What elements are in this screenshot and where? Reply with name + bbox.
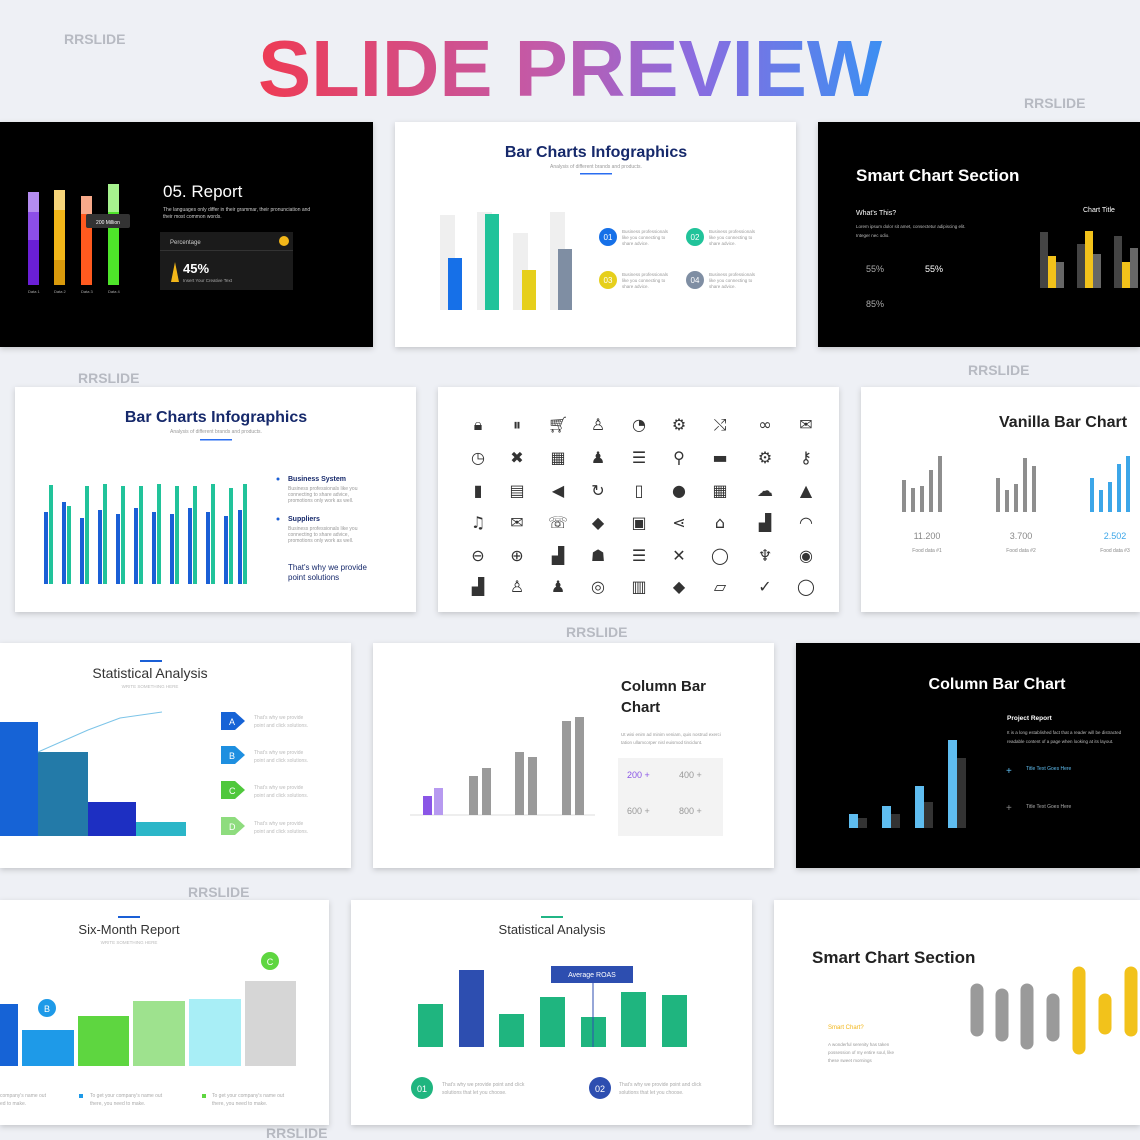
slide: icon grid: ▤ [509, 481, 525, 500]
slide: smart chart section dark: 55% [925, 264, 943, 274]
slide: icon grid: ◯ [711, 546, 729, 565]
slide: icon grid: ▯ [635, 481, 643, 500]
slide: icon grid [438, 387, 839, 612]
slide: column bar chart dark: Column Bar Chart [929, 676, 1066, 693]
slide: bar charts infographics 2: Business professionals like you [288, 526, 358, 532]
slide: icon grid: ☁ [757, 481, 773, 500]
watermarks: RRSLIDE [188, 884, 249, 900]
slide: six-month report: B [44, 1004, 50, 1014]
slide: statistical analysis area: D [229, 822, 236, 832]
slide: statistical analysis area: That's why we provide [254, 785, 304, 791]
slide: six-month report: there, you need to make. [90, 1101, 145, 1107]
slide: statistical analysis bars: solutions that let you choose. [619, 1090, 684, 1096]
slide: 05 report: Insert Your Creative Text [183, 278, 233, 283]
slide: icon grid: ▲ [800, 481, 813, 500]
slide: icon grid: ∞ [758, 415, 772, 434]
slide: icon grid: ♫ [471, 513, 485, 532]
slide: smart chart section dark [818, 122, 1140, 347]
slide: statistical analysis area: point and click solutions. [254, 723, 308, 729]
slide: bar charts infographics 2: point solutions [288, 573, 339, 582]
slide: statistical analysis area: B [229, 751, 235, 761]
slide: smart chart section light: A wonderful serenity has taken [828, 1042, 890, 1047]
slide: statistical analysis bars: solutions that let you choose. [442, 1090, 506, 1096]
slide: bar charts infographics 2: Bar Charts Infographics [125, 409, 307, 426]
slide: icon grid: ▣ [631, 513, 647, 532]
slide: icon grid: ⊖ [471, 546, 485, 565]
slide: bar charts infographics 2: Business System [288, 476, 346, 483]
slide: six-month report: WRITE SOMETHING HERE [101, 940, 157, 945]
slide: bar charts infographics 1: 02 [691, 233, 700, 242]
slide: bar charts infographics 2: That's why we provide [288, 563, 367, 572]
slide: bar charts infographics 1: like you connecting to [622, 278, 666, 283]
slide: six-month report: To get your company's name out [212, 1093, 285, 1099]
slide: bar charts infographics 1: share advice. [709, 284, 736, 289]
slide: column bar chart dark: It is a long established fact that a reader will be distracted [1007, 730, 1122, 735]
slide: icon grid: ◔ [632, 415, 646, 434]
slide: statistical analysis area: WRITE SOMETHING HERE [122, 684, 178, 689]
slide: column bar chart dark: + [1006, 766, 1012, 777]
slide: icon grid: ▮ [474, 481, 482, 500]
slide: vanilla bar chart: Food data #3 [1100, 548, 1130, 554]
slide: icon grid: ◯ [797, 577, 815, 596]
slide: bar charts infographics 1: Bar Charts Infographics [505, 144, 687, 161]
slide: icon grid: ☰ [632, 448, 646, 467]
slide: bar charts infographics 1: 03 [604, 276, 613, 285]
slide: column bar chart dark: Title Text Goes Here [1026, 766, 1072, 772]
slide: 05 report [0, 122, 373, 347]
slide: statistical analysis area: Statistical Analysis [92, 665, 208, 681]
slide: smart chart section dark: What's This? [856, 210, 896, 217]
slide: bar charts infographics 1: like you connecting to [709, 235, 753, 240]
slide: column bar chart dark: + [1006, 803, 1012, 814]
slide: icon grid: ▟ [551, 546, 565, 565]
slide: column bar chart dark: readable content of a page when looking at its layout. [1007, 739, 1113, 744]
slide: column bar chart light: 600 + [627, 806, 650, 816]
slide: statistical analysis area: That's why we provide [254, 715, 304, 721]
slide: statistical analysis area: That's why we provide [254, 821, 304, 827]
slide: vanilla bar chart: Vanilla Bar Chart [999, 414, 1128, 431]
slide: statistical analysis bars: 01 [417, 1084, 427, 1094]
slide: bar charts infographics 1: share advice. [622, 284, 649, 289]
slide: icon grid: ⏸ [513, 415, 521, 434]
slide: bar charts infographics 1: Business professionals [709, 272, 756, 277]
slide: icon grid: ⚲ [673, 448, 685, 467]
slide: icon grid: ◉ [799, 546, 813, 565]
slide: smart chart section dark: 55% [866, 264, 884, 274]
slide: column bar chart dark [796, 643, 1140, 868]
slide: icon grid: ◆ [592, 513, 605, 532]
slide: vanilla bar chart [861, 387, 1140, 612]
slide: bar charts infographics 1: 04 [691, 276, 700, 285]
slide: bar charts infographics 2: promotions only work as well. [288, 498, 353, 504]
slide: icon grid: ☏ [548, 513, 568, 532]
slide: column bar chart light: Ut wisi enim ad minim veniam, quis nostrud exerci [621, 732, 721, 737]
slide: icon grid: ♟ [591, 448, 605, 467]
slide: six-month report: ed to make. [0, 1101, 26, 1107]
slide: smart chart section light [774, 900, 1140, 1125]
slide: statistical analysis bars: Average ROAS [568, 972, 616, 979]
slide: smart chart section light: possession of my entire soul, like [828, 1050, 895, 1055]
slide: bar charts infographics 2: connecting to share advice, [288, 492, 349, 498]
slide: column bar chart dark: Project Report [1007, 715, 1053, 722]
slide: smart chart section dark: Smart Chart Section [856, 166, 1019, 185]
slide: icon grid: ▱ [714, 577, 727, 596]
slide: six-month report: there, you need to make. [212, 1101, 267, 1107]
slide: icon grid: ⋖ [672, 513, 686, 532]
slide: smart chart section dark: Chart Title [1083, 207, 1115, 214]
slide: statistical analysis area: point and click solutions. [254, 793, 308, 799]
slide: 05 report: 05. Report [163, 182, 243, 201]
slide: bar charts infographics 2: Suppliers [288, 516, 320, 523]
slide: 05 report: their most common words. [163, 214, 222, 220]
slide: statistical analysis area: C [229, 786, 236, 796]
slide: icon grid: ◠ [799, 513, 813, 532]
slide: 05 report: Data 2 [54, 289, 67, 294]
slide: icon grid: ◎ [591, 577, 605, 596]
slide: column bar chart light: 200 + [627, 770, 650, 780]
slide: bar charts infographics 1 [395, 122, 796, 347]
slide: icon grid: ✖ [510, 448, 524, 467]
slide: icon grid: ☗ [591, 546, 605, 565]
slide: 05 report: 45% [183, 261, 209, 276]
slide: statistical analysis area: That's why we provide [254, 750, 304, 756]
watermarks: RRSLIDE [78, 370, 139, 386]
slide: six-month report: To get your company's name out [90, 1093, 163, 1099]
slide: statistical analysis bars: That's why we provide point and click [442, 1082, 525, 1088]
slide: icon grid: 🛒︎ [548, 415, 568, 434]
slide: icon grid: ♙ [510, 577, 524, 596]
slide: icon grid: ✉ [799, 415, 813, 434]
slide: vanilla bar chart: Food data #1 [912, 548, 942, 554]
slide: icon grid: ◆ [673, 577, 686, 596]
slide: 05 report: The languages only differ in their grammar, their pronunciation and [163, 207, 310, 213]
title: SLIDE PREVIEW [258, 24, 882, 113]
slide: smart chart section light: Smart Chart? [828, 1025, 864, 1031]
slide: statistical analysis area: point and click solutions. [254, 758, 308, 764]
slide: statistical analysis bars [351, 900, 752, 1125]
slide: bar charts infographics 1: like you connecting to [709, 278, 753, 283]
slide: column bar chart light: 400 + [679, 770, 702, 780]
slide: icon grid: 🔒︎ [474, 415, 482, 434]
slide: statistical analysis area: A [229, 717, 235, 727]
slide: vanilla bar chart: 11.200 [914, 531, 940, 541]
slide: icon grid: ⚙ [758, 448, 772, 467]
slide: six-month report [0, 900, 329, 1125]
slide: icon grid: ↻ [591, 481, 605, 500]
slide: six-month report: C [267, 957, 274, 967]
slide: icon grid: ▥ [631, 577, 647, 596]
slide: 05 report: 200 Million [96, 220, 120, 226]
slide: statistical analysis bars: Statistical Analysis [499, 922, 606, 937]
slide: icon grid: ⤭ [714, 415, 727, 434]
slide: 05 report: Data 1 [28, 289, 41, 294]
slide: icon grid: ▟ [758, 513, 772, 532]
slide: column bar chart light: Column Bar [621, 678, 706, 695]
slide: 05 report: Data 3 [81, 289, 94, 294]
watermarks: RRSLIDE [1024, 95, 1085, 111]
slide: statistical analysis bars: 02 [595, 1084, 605, 1094]
slide: bar charts infographics 1: 01 [604, 233, 613, 242]
slide: bar charts infographics 2: promotions only work as well. [288, 538, 353, 544]
slide: smart chart section dark: 85% [866, 299, 884, 309]
slide: icon grid: ◀ [552, 481, 565, 500]
slide: icon grid: ⊕ [510, 546, 524, 565]
slide: smart chart section light: these sweet mornings [828, 1058, 873, 1063]
slide: icon grid: ♆ [758, 546, 772, 565]
slide: icon grid: ⚙ [672, 415, 686, 434]
slide: icon grid: ▦ [550, 448, 566, 467]
slide: icon grid: ⚷ [800, 448, 812, 467]
slide: icon grid: ◷ [471, 448, 485, 467]
slide: statistical analysis bars: That's why we provide point and click [619, 1082, 702, 1088]
slide: icon grid: ☰ [632, 546, 646, 565]
watermarks: RRSLIDE [968, 362, 1029, 378]
slide: icon grid: ● [672, 481, 686, 500]
slide: bar charts infographics 2: Business professionals like you [288, 486, 358, 492]
slide: smart chart section light: Smart Chart Section [812, 948, 975, 967]
slide: vanilla bar chart: Food data #2 [1006, 548, 1036, 554]
slide: smart chart section dark: Lorem ipsum dolor sit amet, consectetur adipiscing elit. [856, 224, 966, 229]
slide: column bar chart light: Chart [621, 699, 660, 716]
slide: bar charts infographics 1: share advice. [622, 241, 649, 246]
slide: column bar chart light [373, 643, 774, 868]
slide: column bar chart light: 800 + [679, 806, 702, 816]
slide: 05 report: Data 4 [108, 289, 121, 294]
slide: icon grid: ♟ [551, 577, 565, 596]
slide: icon grid: ♙ [591, 415, 605, 434]
slide: column bar chart dark: Title Text Goes Here [1026, 804, 1072, 810]
slide: bar charts infographics 1: share advice. [709, 241, 736, 246]
slide: column bar chart light: tation ullamcorper nisl euismod tincidunt. [621, 740, 702, 745]
slide: bar charts infographics 2: connecting to share advice, [288, 532, 349, 538]
slide: statistical analysis area [0, 643, 351, 868]
slide: icon grid: ▦ [712, 481, 728, 500]
slide: vanilla bar chart: 2.502 [1104, 531, 1126, 541]
slide: vanilla bar chart: 3.700 [1010, 531, 1032, 541]
slide: bar charts infographics 1: Business professionals [622, 229, 669, 234]
slide: bar charts infographics 1: Business professionals [709, 229, 756, 234]
slide: smart chart section dark: Integer nec odio. [856, 233, 890, 238]
slide: icon grid: ▟ [471, 577, 485, 596]
slide: bar charts infographics 2 [15, 387, 416, 612]
slide: bar charts infographics 1: like you connecting to [622, 235, 666, 240]
slide: icon grid: ✕ [672, 546, 686, 565]
watermarks: RRSLIDE [566, 624, 627, 640]
slide: icon grid: ▬ [712, 448, 728, 467]
slide: icon grid: ✉ [510, 513, 524, 532]
slide: six-month report: company's name out [0, 1093, 47, 1099]
slide: statistical analysis area: point and click solutions. [254, 829, 308, 835]
slide: bar charts infographics 2: Analysis of different brands and products. [170, 429, 262, 435]
slide: icon grid: ⌂ [715, 513, 725, 532]
slide: bar charts infographics 1: Business professionals [622, 272, 669, 277]
slide: six-month report: Six-Month Report [78, 922, 180, 937]
slide: bar charts infographics 1: Analysis of different brands and products. [550, 164, 642, 170]
slide: icon grid: ✓ [758, 577, 772, 596]
slide: 05 report: Percentage [170, 240, 201, 246]
watermarks: RRSLIDE [64, 31, 125, 47]
